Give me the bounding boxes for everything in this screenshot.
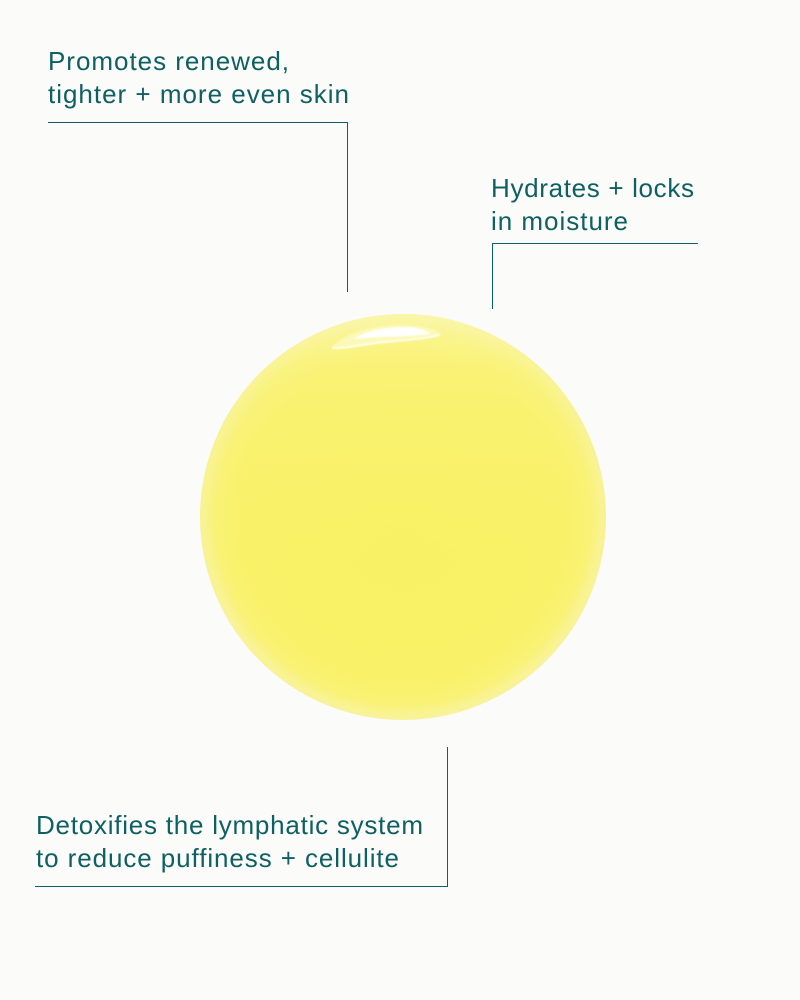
leader line: renewed skin: [48, 122, 348, 292]
leader line: hydration: [492, 244, 698, 309]
callout text: renewed skin: tighter + more even skin: [48, 79, 349, 109]
callout: hydration: [491, 173, 698, 309]
callout: renewed skin: [48, 46, 349, 292]
oil droplet: [200, 314, 606, 720]
callout: detox: [35, 747, 448, 886]
leader line: detox: [35, 747, 448, 886]
callout text: hydration: Hydrates + locks: [491, 173, 694, 203]
callout text: detox: to reduce puffiness + cellulite: [36, 843, 399, 873]
callout text: renewed skin: Promotes renewed,: [48, 46, 289, 76]
callout text: detox: Detoxifies the lymphatic system: [36, 810, 423, 840]
callout text: hydration: in moisture: [491, 206, 628, 236]
droplet highlight: [331, 325, 441, 349]
